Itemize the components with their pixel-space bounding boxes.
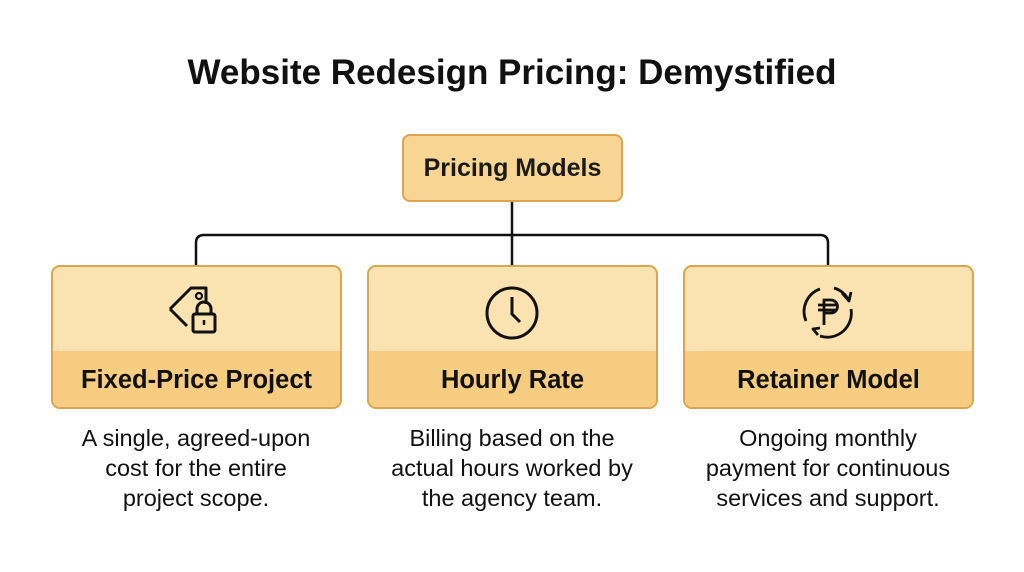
- text: hourly description: Billing based on the: [409, 425, 615, 451]
- label: [53, 351, 340, 407]
- text: fixed-price description: A single, agreed-upon: [82, 425, 310, 451]
- text: retainer description: Ongoing monthly: [739, 425, 917, 451]
- panel: hourly: [367, 265, 658, 409]
- text: fixed-price description: [82, 425, 310, 511]
- text: fixed-price description: project scope.: [123, 485, 269, 511]
- title: Website Redesign Pricing: Demystified: [188, 53, 836, 92]
- panel: retainer: [683, 265, 974, 409]
- icon: tag with lock: [169, 286, 216, 334]
- root node: Pricing Models: [402, 134, 623, 202]
- panel: fixed-price: [51, 265, 342, 409]
- icon: clock: [486, 286, 538, 340]
- label: [685, 351, 972, 407]
- label: Hourly Rate: [441, 366, 584, 394]
- label: Fixed-Price Project: [81, 366, 312, 394]
- label: [369, 351, 656, 407]
- text: hourly description: [391, 425, 633, 511]
- icon: recurring currency: [802, 286, 853, 339]
- text: hourly description: actual hours worked by: [391, 455, 633, 481]
- text: retainer description: [706, 425, 950, 511]
- root node: Pricing Models: Pricing Models: [424, 154, 601, 182]
- text: fixed-price description: cost for the entire: [105, 455, 287, 481]
- text: hourly description: the agency team.: [422, 485, 602, 511]
- text: retainer description: payment for continuous: [706, 455, 950, 481]
- text: retainer description: services and support.: [716, 485, 940, 511]
- label: Retainer Model: [737, 366, 920, 394]
